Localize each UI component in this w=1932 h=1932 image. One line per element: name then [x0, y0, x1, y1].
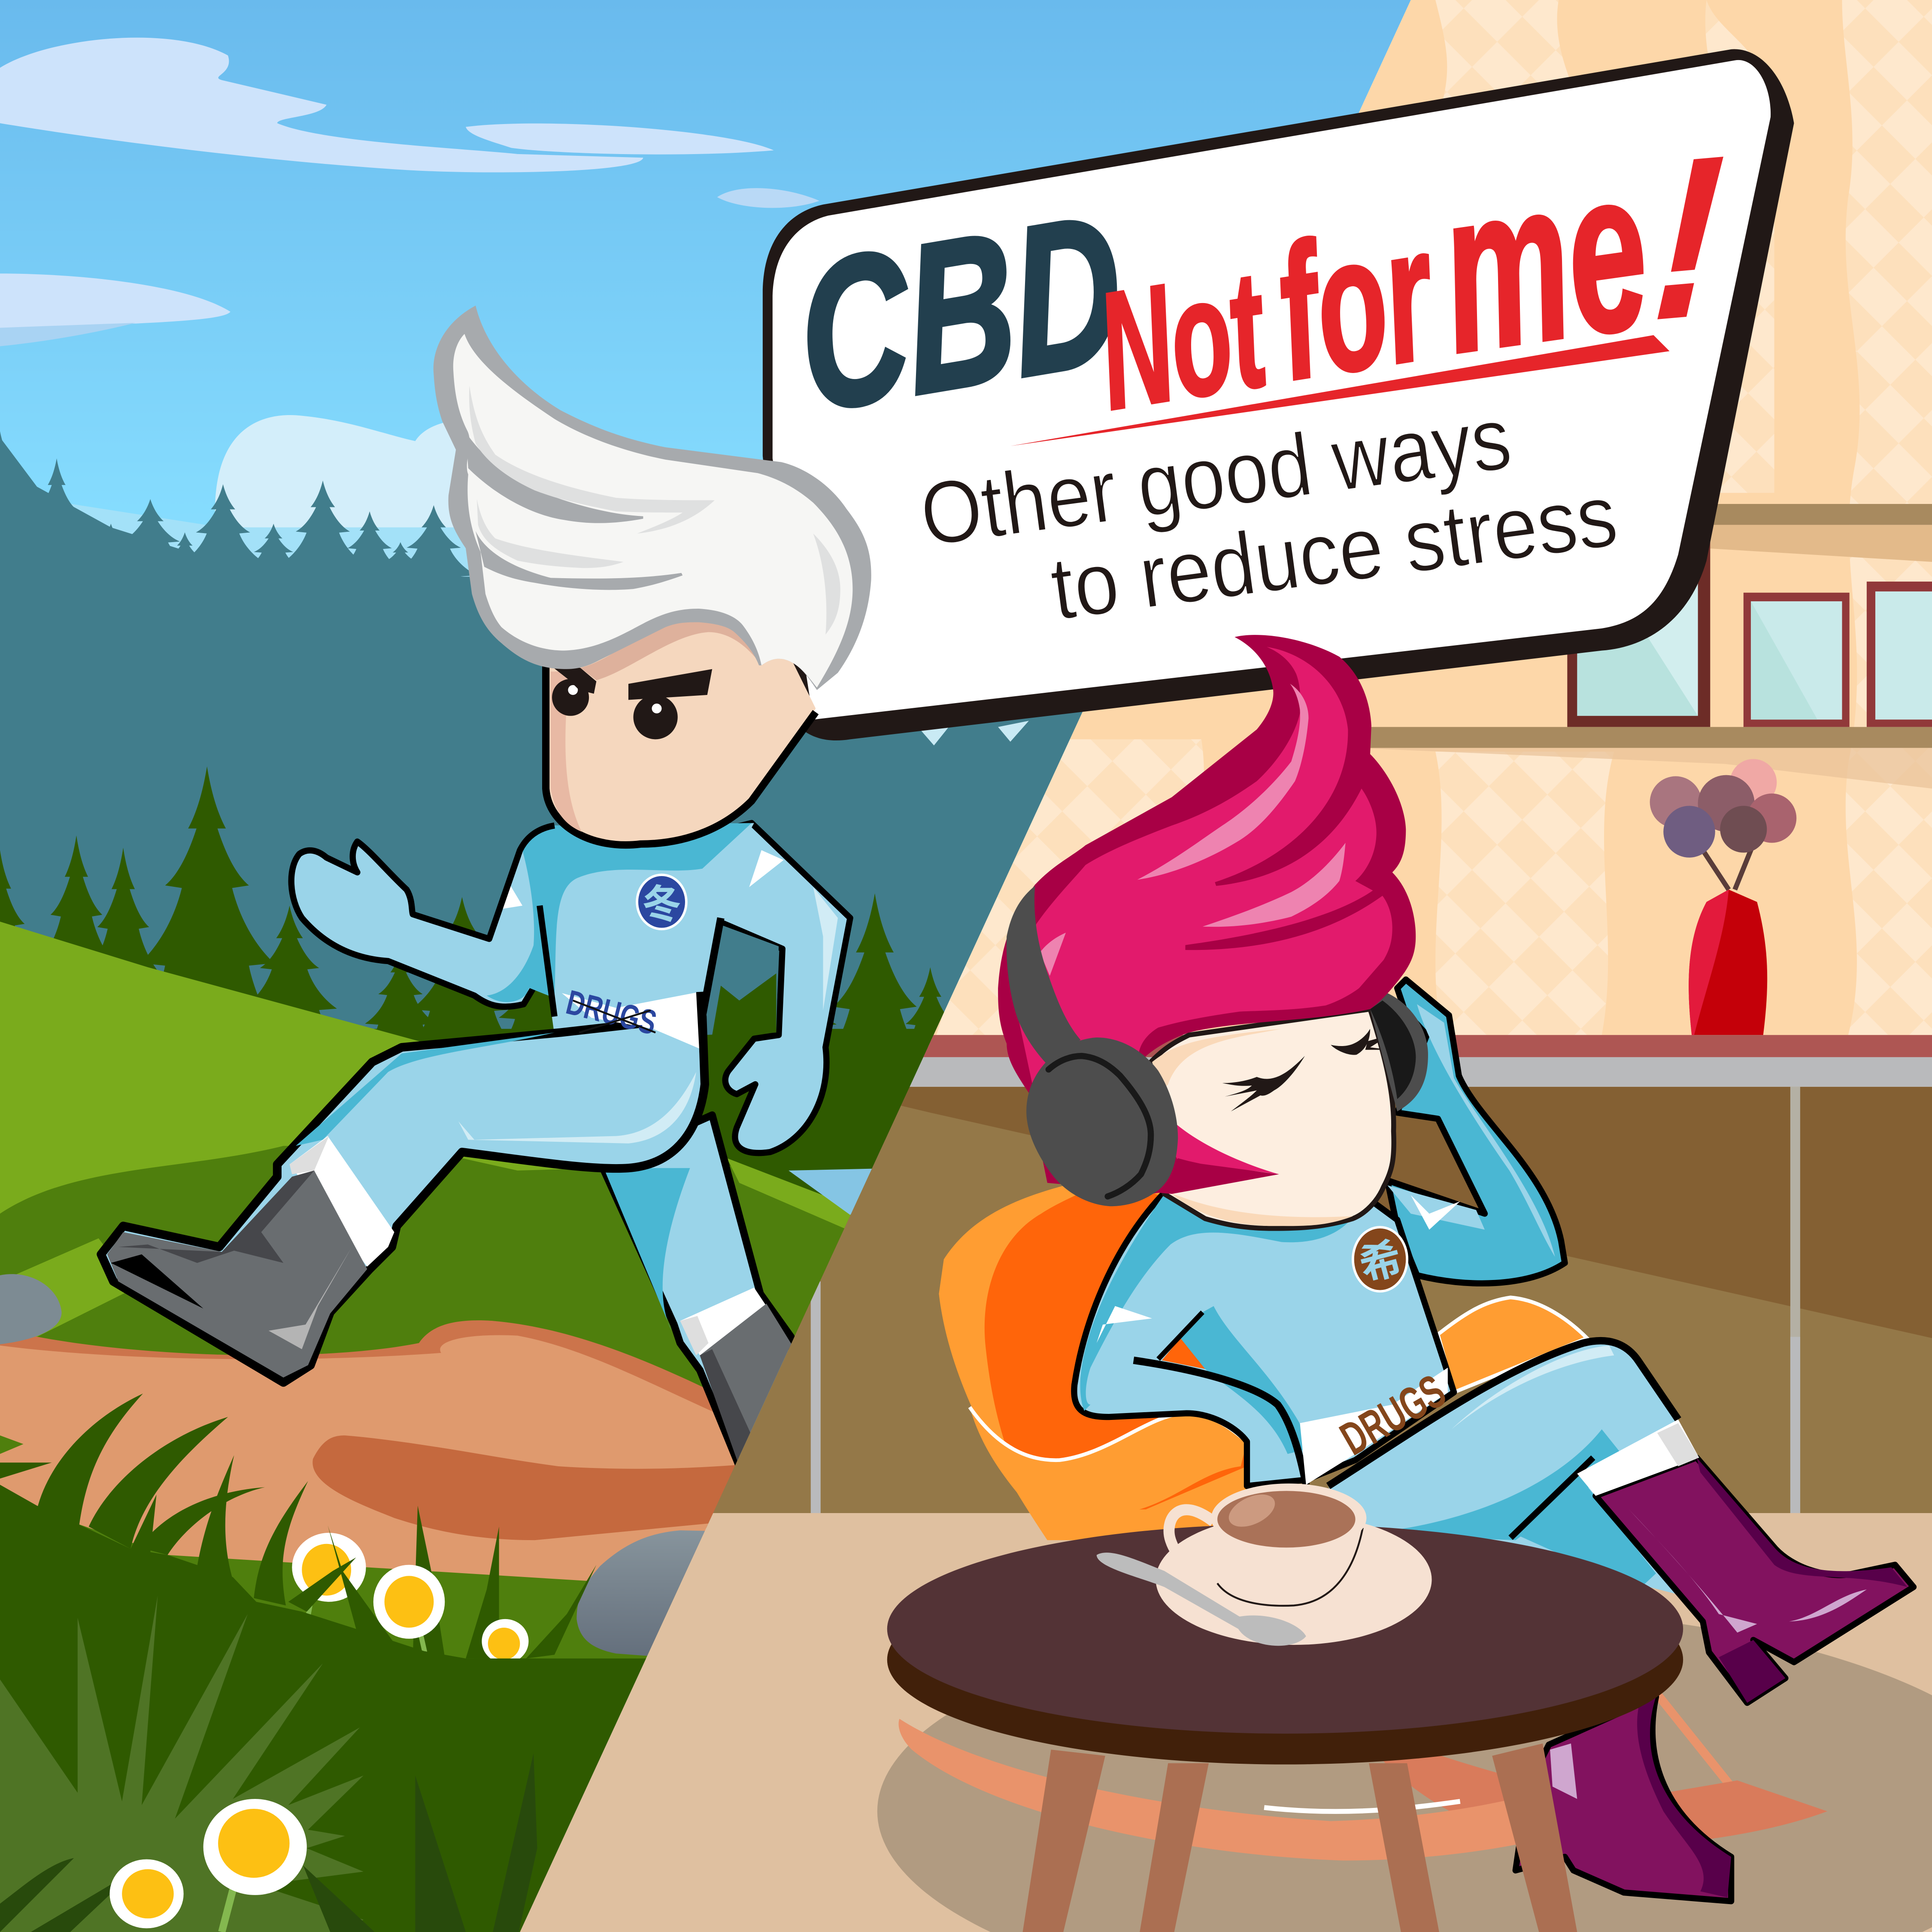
- small trees below sign: [918, 721, 1029, 746]
- subtitle: [915, 388, 1623, 638]
- character: relaxing woman: [887, 635, 1914, 1932]
- heading: CBD: CBD: [790, 169, 1131, 456]
- large flowers: [109, 1799, 307, 1932]
- flowers behind grass: [292, 1506, 445, 1657]
- window 2: [1744, 593, 1850, 727]
- belt: [562, 992, 702, 1050]
- white hair: [434, 306, 871, 690]
- boot cuff: [290, 1136, 394, 1267]
- window 1: [1567, 542, 1710, 727]
- flowers in vase: [1650, 759, 1796, 1035]
- badge: winter character: 冬: [642, 883, 681, 927]
- subtitle: Other good ways: [915, 388, 1516, 564]
- coffee cup and saucer: [1156, 1483, 1432, 1645]
- front leg: [101, 983, 705, 1383]
- boot: [107, 1171, 367, 1377]
- wall: [518, 0, 1932, 1047]
- eyebrows: [552, 667, 596, 694]
- small flower in front of blades: [474, 1619, 536, 1668]
- closed eye right: [1331, 1029, 1390, 1055]
- orange chair: [939, 1177, 1587, 1540]
- speech sign: [763, 49, 1794, 746]
- window 3: [1867, 582, 1932, 727]
- sign face: [773, 60, 1771, 719]
- face: [1149, 1009, 1394, 1228]
- chair rockers: [898, 1694, 1827, 1861]
- foreground grass: [0, 1394, 862, 1932]
- clouds: [0, 38, 819, 576]
- character: running man: [101, 306, 871, 1466]
- grass blades: [0, 1394, 596, 1659]
- badge: hope character: 希: [1354, 1234, 1407, 1290]
- purple boot: [1577, 1419, 1914, 1703]
- green hills: [0, 922, 872, 1408]
- subtitle: to reduce stress: [1045, 465, 1623, 638]
- torso: [1074, 1189, 1454, 1486]
- text: DRUGS belt: DRUGS: [1332, 1365, 1454, 1465]
- back leg: [601, 1115, 801, 1466]
- lower boot: [1516, 1697, 1731, 1901]
- pink hair: [998, 635, 1416, 1194]
- raised arm: [291, 842, 591, 1007]
- headphone right cup: [1370, 993, 1428, 1111]
- dark green pine forest: [0, 766, 986, 1349]
- dark foreground blades: [0, 1753, 537, 1932]
- heading: Not for me!: for: [1263, 185, 1450, 419]
- red underline: [1010, 335, 1670, 446]
- headphones left: [1007, 886, 1178, 1206]
- crossed leg: [1328, 1341, 1707, 1602]
- closed eye left: [1222, 1056, 1305, 1111]
- face: [546, 604, 816, 845]
- right arm: [690, 823, 850, 1153]
- raised arm: [1387, 980, 1565, 1283]
- rocks: [0, 1274, 739, 1657]
- eyes: [552, 679, 589, 716]
- counter: [616, 1035, 1932, 1528]
- dirt path: [0, 1320, 736, 1626]
- rug: [877, 1608, 1932, 1932]
- floor: [518, 1513, 1932, 1932]
- badge: winter character: [636, 873, 688, 930]
- wall pattern: [937, 0, 1932, 1035]
- spiky fan plant: [0, 1595, 364, 1932]
- lower shelf: [1356, 727, 1932, 789]
- sky: [0, 0, 1417, 542]
- coffee table: [887, 1524, 1683, 1932]
- heading: Not for me!: Not: [1087, 236, 1280, 444]
- torso: [489, 823, 754, 1035]
- panel: outdoor meadow scene: [0, 0, 1417, 1932]
- panel: indoor cafe scene: [518, 0, 1932, 1932]
- upper shelf: [1707, 504, 1932, 562]
- heading: Not for me!: me: [1426, 119, 1662, 401]
- heading: Not for me!: !: [1649, 110, 1728, 366]
- text: DRUGS belt: DRUGS: [562, 983, 660, 1042]
- spoon: [1097, 1553, 1306, 1646]
- mid green grass: [0, 1497, 862, 1932]
- grass mass: [0, 1485, 862, 1932]
- skin shadow under hair: [580, 615, 761, 680]
- sign shadow and outline: [763, 49, 1794, 740]
- heading: Not for me!: [1087, 110, 1728, 444]
- distant teal forest: [0, 431, 1109, 1070]
